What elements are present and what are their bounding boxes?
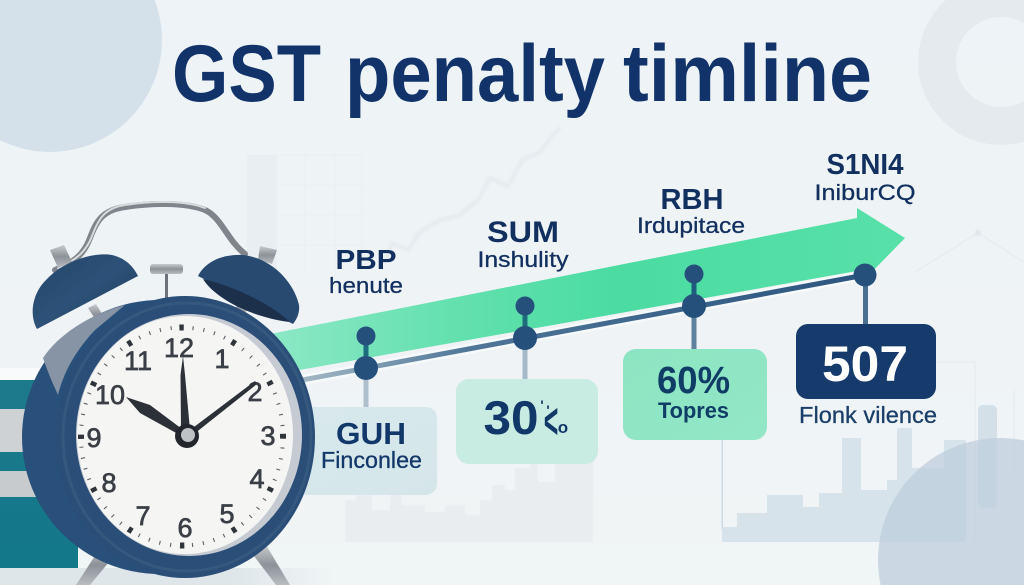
milestone 4: node [854, 264, 876, 286]
milestone 1: heading [329, 244, 403, 298]
clock body [22, 300, 298, 574]
clock numerals [86, 333, 276, 543]
milestone 2: box: < [544, 394, 558, 449]
clock numerals: 5 [219, 499, 235, 529]
milestone 4: box [796, 284, 936, 399]
green timeline arrow [260, 208, 905, 377]
milestone 3: box [623, 316, 767, 440]
milestone 4: heading [814, 149, 916, 205]
milestone 1: nodes [354, 326, 378, 380]
milestone 2: box: ' [540, 397, 544, 413]
clock numerals: 1 [214, 344, 230, 374]
milestone 3: heading [637, 184, 745, 238]
milestone 3: box: 60% [657, 360, 730, 402]
milestone 4: heading: S1NI4 [826, 149, 904, 181]
decorative ring: top right [918, 0, 1024, 145]
faint background line chart [385, 128, 560, 262]
decorative circle: bottom right [878, 438, 1024, 585]
clock numerals: 9 [86, 423, 102, 453]
milestone 2: box: ' [546, 402, 550, 418]
milestone 2: heading [478, 216, 568, 272]
milestone 2: heading: Inshulity [478, 247, 568, 272]
books [0, 368, 78, 568]
clock numerals: 6 [177, 513, 193, 543]
clock handle [55, 202, 245, 270]
clock numerals: 10 [95, 380, 125, 410]
clock face [77, 316, 293, 554]
clock bezel [55, 296, 315, 578]
clock knobs [50, 245, 277, 325]
clock numerals: 7 [135, 501, 151, 531]
clock hands [126, 356, 257, 448]
clock numerals: 12 [164, 333, 194, 363]
milestone 4: box: 507 [822, 336, 908, 392]
milestone 2: box: o [558, 418, 568, 437]
title [172, 29, 872, 119]
pale bar chart: bottom right [722, 428, 966, 542]
clock bell: left [33, 254, 138, 329]
milestone 4: heading: IniburCQ [814, 180, 916, 205]
milestone 1: box: GUH [336, 416, 406, 451]
decorative circle: top left [0, 0, 162, 152]
milestone 2: nodes [513, 296, 537, 350]
milestone 3: box: Topres [658, 398, 729, 423]
milestone 1: heading: henute [329, 273, 403, 298]
faint background network lines [910, 230, 1024, 540]
clock bell: right [198, 255, 299, 324]
alarm clock [22, 202, 315, 585]
milestone 1: box: Finconlee [321, 447, 422, 473]
milestone 2: heading: SUM [487, 216, 559, 249]
clock numerals: 4 [249, 464, 265, 494]
clock ticks [81, 328, 283, 546]
clock numerals: 3 [260, 421, 276, 451]
pale thermometer bar [978, 405, 997, 508]
milestone 2: box [456, 348, 598, 464]
clock numerals: 2 [247, 377, 263, 407]
table shadow [0, 568, 330, 585]
clock feet [76, 545, 290, 585]
title: timline [623, 29, 872, 119]
milestone 3: heading: RBH [660, 184, 724, 216]
milestone 1: heading: PBP [336, 244, 396, 275]
title: GST [172, 29, 321, 119]
clock numerals: 8 [101, 468, 117, 498]
clock numerals: 11 [124, 346, 152, 376]
faint background grid panel [247, 155, 362, 275]
milestone 2: box: 30 [484, 391, 538, 444]
milestone 3: nodes [682, 264, 706, 318]
timeline line [270, 275, 865, 386]
milestone 4: caption: Flonk vilence [799, 402, 937, 428]
faint skyline chart: left [345, 440, 593, 542]
title: penalty [345, 29, 605, 119]
milestone 3: heading: Irdupitace [637, 213, 745, 238]
milestone 1: box [295, 380, 437, 495]
